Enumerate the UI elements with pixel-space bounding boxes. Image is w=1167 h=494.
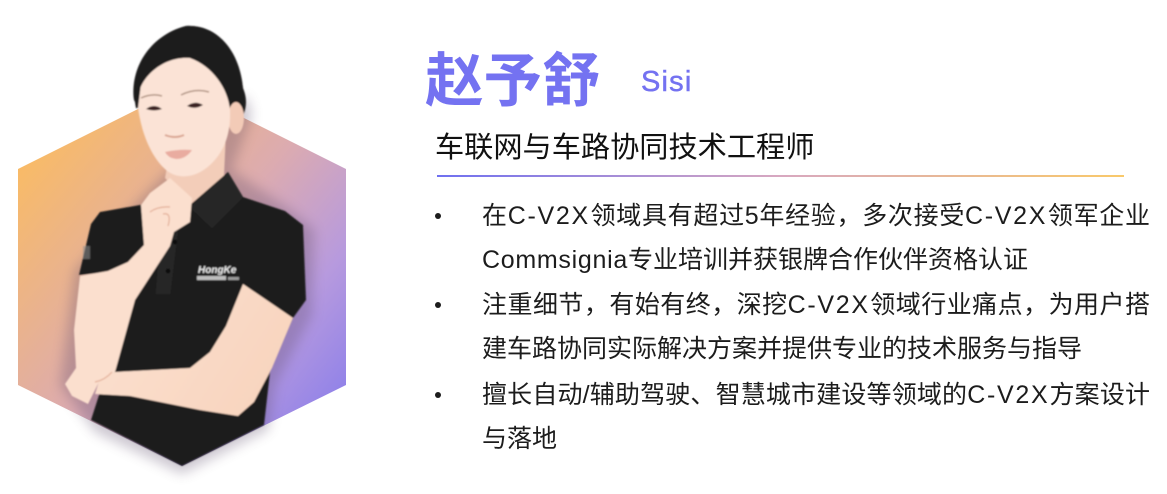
shirt — [79, 172, 306, 466]
title divider — [437, 175, 1124, 177]
english name: Sisi — [641, 66, 693, 98]
crossed forearm — [95, 284, 293, 416]
ear — [228, 102, 244, 134]
bullet list — [435, 202, 1150, 453]
bullet 3: 擅长自动/辅助驾驶、智慧城市建设等领域的C-V2X方案设计 — [482, 381, 1150, 409]
bullet 1: 在C-V2X领域具有超过5年经验，多次接受C-V2X领军企业 — [482, 202, 1150, 230]
bullet 1 — [435, 202, 1150, 274]
shirt logo — [197, 265, 239, 280]
collar — [190, 172, 243, 228]
hair back — [135, 26, 246, 124]
bullet 3: 与落地 — [482, 425, 557, 453]
bullet 2: 建车路协同实际解决方案并提供专业的技术服务与指导 — [482, 335, 1082, 363]
placket — [156, 228, 178, 294]
raised arm and hand — [65, 178, 192, 404]
job title: 车联网与车路协同技术工程师 — [435, 132, 814, 164]
mouth — [165, 150, 192, 159]
portrait with hexagon background — [18, 24, 346, 478]
shirt buttons — [166, 240, 178, 274]
finger shading — [95, 207, 170, 382]
bullet 1: Commsignia专业培训并获银牌合作伙伴资格认证 — [482, 246, 1028, 274]
hexagon background — [18, 87, 346, 466]
face — [137, 58, 230, 176]
eyes and brows — [141, 91, 209, 110]
sleeve mark — [83, 246, 90, 259]
hair front — [133, 26, 243, 108]
bullet 2 — [435, 291, 1150, 363]
bullet 3 — [435, 381, 1150, 453]
bullet 2: 注重细节，有始有终，深挖C-V2X领域行业痛点，为用户搭 — [482, 291, 1150, 319]
person shadow — [60, 95, 314, 474]
name: 赵予舒 — [425, 49, 601, 114]
neck — [165, 132, 226, 205]
shirt logo: HongKe — [198, 265, 237, 276]
nose — [165, 135, 184, 137]
person — [65, 26, 306, 466]
